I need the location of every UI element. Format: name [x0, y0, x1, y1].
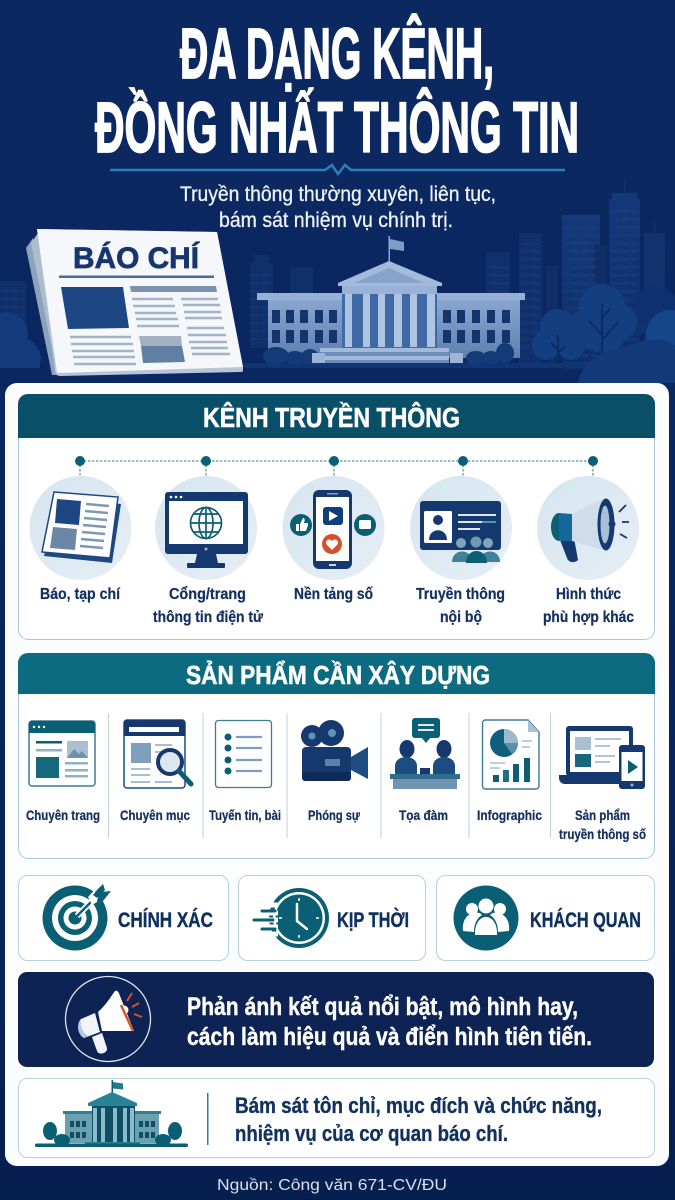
icon: nền tảng số — [282, 476, 384, 580]
banner text: Phản ánh kết quả nổi bật, mô hình hay, — [187, 993, 578, 1021]
label: hình thức khác: phù hợp khác — [543, 609, 634, 626]
city skyline — [0, 173, 665, 370]
icon: cổng thông tin — [155, 476, 257, 580]
icon: truyền thông nội bộ — [410, 476, 512, 580]
icon: building — [35, 1080, 188, 1147]
card: kịp thời — [238, 876, 426, 960]
icon: tuyến tin, bài — [216, 720, 272, 788]
label: kịp thời: KỊP THỜI — [337, 908, 409, 932]
icon: clock — [254, 888, 329, 948]
panel: sản phẩm cần xây dựng — [18, 653, 655, 858]
label: chuyên trang: Chuyên trang — [26, 807, 100, 823]
label: hình thức khác: Hình thức — [556, 586, 621, 603]
label: chuyên mục: Chuyên mục — [120, 807, 190, 823]
card: bám sát tôn chỉ — [18, 1078, 654, 1158]
icon: phóng sự — [301, 720, 368, 781]
subtitle: Truyền thông thường xuyên, liên tục, — [180, 183, 496, 206]
label: truyền thông nội bộ: nội bộ — [440, 609, 482, 626]
capitol building illustration — [257, 236, 525, 365]
section header: kênh truyền thông: KÊNH TRUYỀN THÔNG — [203, 401, 460, 433]
main white panel — [5, 383, 669, 1166]
source footer: Nguồn: Công văn 671-CV/ĐU — [217, 1177, 447, 1194]
banner text — [187, 993, 592, 1051]
icon: chuyên trang — [29, 721, 95, 786]
icon: infographic — [482, 720, 539, 789]
banner text: cách làm hiệu quả và điển hình tiên tiến. — [187, 1023, 592, 1051]
label: sản phẩm truyền thông số: Sản phẩm — [575, 807, 630, 823]
newspaper BÁO CHÍ: BÁO CHÍ — [73, 241, 200, 275]
section header: kênh truyền thông — [18, 394, 655, 438]
card text — [235, 1093, 602, 1146]
icon: people — [454, 886, 518, 950]
label: truyền thông nội bộ: Truyền thông — [416, 586, 505, 603]
label: sản phẩm truyền thông số: truyền thông số — [559, 826, 646, 842]
icon: báo, tạp chí — [30, 476, 132, 580]
label: infographic: Infographic — [477, 807, 542, 823]
card text: nhiệm vụ của cơ quan báo chí. — [235, 1121, 508, 1146]
label: hình thức khác — [543, 586, 634, 626]
icon: target — [42, 884, 111, 950]
label: chính xác: CHÍNH XÁC — [118, 909, 213, 932]
label: nền tảng số: Nền tảng số — [294, 586, 373, 603]
label: tuyến tin, bài: Tuyến tin, bài — [209, 807, 281, 823]
icon: tọa đàm — [390, 718, 460, 789]
subtitle: bám sát nhiệm vụ chính trị. — [219, 209, 453, 232]
icon: hình thức khác — [537, 476, 639, 580]
section header: sản phẩm — [18, 653, 655, 694]
section header: sản phẩm: SẢN PHẨM CẦN XÂY DỰNG — [186, 660, 490, 690]
label: cổng thông tin: thông tin điện tử — [153, 609, 263, 626]
icon: chuyên mục — [124, 720, 191, 788]
card text: Bám sát tôn chỉ, mục đích và chức năng, — [235, 1093, 602, 1118]
label: tọa đàm: Tọa đàm — [399, 807, 448, 823]
title underline with pulse — [110, 165, 565, 174]
icon: sản phẩm truyền thông số — [559, 726, 645, 789]
subtitle — [180, 183, 496, 232]
label: truyền thông nội bộ — [416, 586, 505, 626]
label: cổng thông tin: Cổng/trang — [169, 585, 246, 603]
card: khách quan — [436, 876, 654, 960]
icon: megaphone — [66, 976, 150, 1062]
label: phóng sự: Phóng sự — [308, 807, 361, 823]
panel: kênh truyền thông — [18, 394, 655, 640]
card: chính xác — [18, 876, 228, 960]
newspaper BÁO CHÍ — [26, 229, 243, 376]
label: báo, tạp chí: Báo, tạp chí — [40, 586, 120, 603]
label: sản phẩm truyền thông số — [559, 807, 646, 842]
label: cổng thông tin — [153, 585, 263, 626]
banner: phản ánh kết quả — [18, 972, 654, 1067]
trees — [0, 284, 675, 383]
title — [95, 14, 579, 168]
timeline connector — [75, 456, 598, 476]
label: khách quan: KHÁCH QUAN — [530, 909, 641, 932]
